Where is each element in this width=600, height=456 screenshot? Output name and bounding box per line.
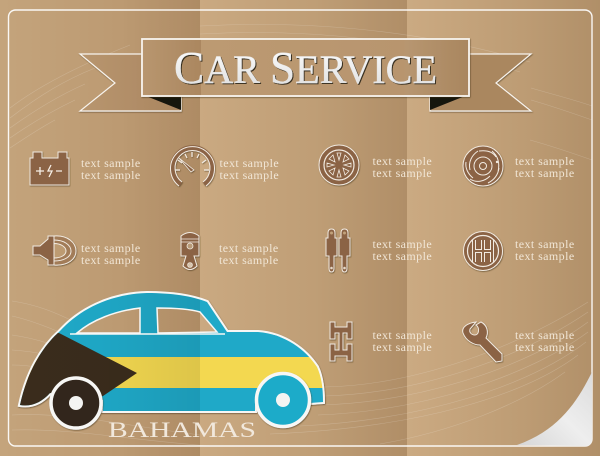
label: battery: text sample (81, 156, 141, 170)
icon: shock absorbers (326, 229, 350, 272)
car body flag (20, 293, 323, 411)
label: horn: text sample (81, 241, 141, 255)
country name: BAHAMAS (108, 417, 256, 442)
icon: axle chassis (330, 322, 352, 361)
icon: speedometer (170, 147, 214, 186)
label: wheel: text sample (372, 154, 432, 168)
ribbon left tail (80, 54, 181, 111)
window frames (77, 308, 217, 333)
rear wheel (51, 378, 101, 428)
icon: piston (181, 232, 199, 270)
label: battery: text sample (81, 168, 141, 182)
car white outline (20, 293, 323, 411)
front wheel (256, 374, 310, 426)
label: speedometer: text sample (220, 156, 279, 170)
label: brake disc: text sample (515, 166, 575, 180)
label: shock absorbers: text sample (372, 237, 432, 251)
label: axle chassis: text sample (372, 328, 432, 342)
icon: gear shift (464, 232, 502, 270)
icon: wheel (319, 145, 359, 185)
label: wheel: text sample (372, 166, 432, 180)
label: wrench: text sample (515, 340, 575, 354)
label: wrench: text sample (515, 328, 575, 342)
label: piston: text sample (219, 253, 279, 267)
ribbon right tail (430, 54, 531, 111)
label: gear shift: text sample (515, 249, 575, 263)
ribbon main panel (142, 39, 469, 96)
car in Bahamas flag colours (18, 291, 326, 432)
roofline white strip (70, 333, 225, 335)
icon: brake disc (463, 146, 503, 186)
label: gear shift: text sample (515, 237, 575, 251)
title ribbon (80, 39, 531, 111)
title text: CAR SERVICE (174, 43, 437, 93)
label: horn: text sample (81, 253, 141, 267)
icon: horn (33, 236, 76, 265)
label: axle chassis: text sample (372, 340, 432, 354)
icon: wrench (463, 322, 502, 362)
icon: battery (30, 152, 69, 185)
page curl (517, 372, 592, 446)
label: shock absorbers: text sample (372, 249, 432, 263)
label: piston: text sample (219, 241, 279, 255)
label: brake disc: text sample (515, 154, 575, 168)
label: speedometer: text sample (220, 168, 279, 182)
